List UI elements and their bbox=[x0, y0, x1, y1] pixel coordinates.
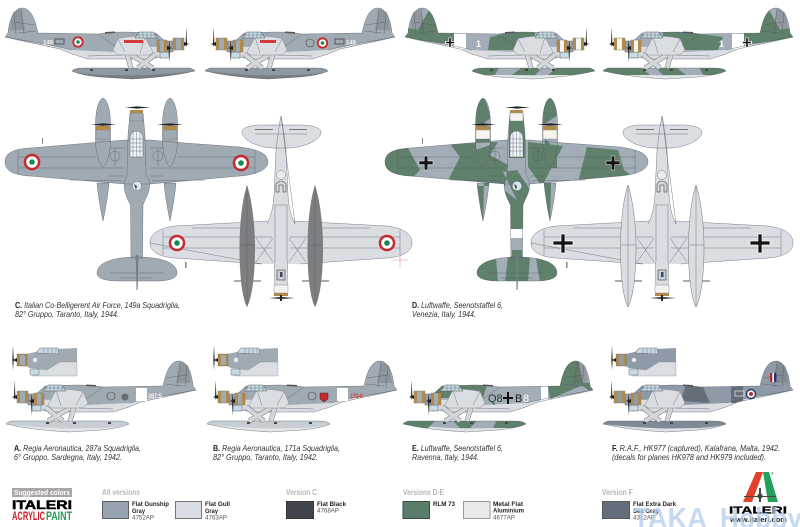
caption A: A. Regia Aeronautica, 287a Squadriglia, bbox=[14, 443, 141, 453]
markings: RAF roundel and fin flash bbox=[735, 373, 776, 399]
floats bbox=[240, 185, 323, 307]
icon: tricolour A with plane bbox=[743, 472, 778, 502]
swatch: Flat Gunship Gray: 4752AP bbox=[132, 514, 154, 522]
markings: Q8 + B8 code: 8 bbox=[523, 393, 529, 405]
plane F: nose detail bbox=[611, 345, 676, 376]
colour group: versions D-E: Versions D-E bbox=[403, 488, 445, 497]
colour group: all versions bbox=[102, 488, 230, 522]
markings: Q8 + B8 code: Q8 bbox=[488, 393, 503, 405]
colour group: version F: Version F bbox=[602, 488, 633, 497]
markings: roundel and code: 149 bbox=[346, 40, 357, 46]
markings: band and code: 287-5 bbox=[148, 394, 163, 400]
swatch: Flat Extra Dark Sea Gray bbox=[602, 501, 676, 522]
plane C: right side profile bbox=[205, 8, 395, 79]
caption C: C. Italian Co-Belligerent Air Force, 149a Squadriglia, bbox=[15, 300, 180, 310]
text: Venezia, Italy, 1944. bbox=[412, 309, 476, 319]
watermark bbox=[633, 503, 800, 527]
swatch: Metal Flat Aluminium: Aluminium bbox=[493, 508, 524, 514]
swatch: Metal Flat Aluminium bbox=[464, 501, 524, 522]
swatch: Flat Gull Gray bbox=[176, 501, 230, 522]
plane F: side profile bbox=[603, 361, 793, 432]
wing crosses bbox=[419, 156, 620, 170]
markings: cross and number bbox=[719, 38, 752, 49]
plane A: side profile bbox=[6, 361, 196, 432]
swatch: Flat Black: 4768AP bbox=[317, 508, 339, 514]
swatch: Flat Extra Dark Sea Gray: Flat Extra Dark bbox=[633, 501, 676, 508]
plane B: side profile bbox=[207, 361, 397, 432]
caption E: E. Luftwaffe, Seenotstaffel 6, bbox=[412, 443, 503, 453]
plane C: left side profile bbox=[5, 8, 195, 79]
text: 82° Gruppo, Taranto, Italy, 1944. bbox=[15, 309, 119, 319]
plane C: upper plan view bbox=[5, 98, 268, 290]
swatch: Flat Gunship Gray: Flat Gunship bbox=[132, 501, 169, 508]
wing crosses bbox=[553, 234, 770, 253]
markings: cross and number: 1 bbox=[476, 39, 481, 49]
caption B: B. Regia Aeronautica, 171a Squadriglia, bbox=[213, 443, 340, 453]
text: 6° Gruppo, Sardegna, Italy, 1942. bbox=[14, 452, 122, 462]
plane D: left side profile bbox=[400, 8, 595, 79]
markings: band, badge and code bbox=[308, 388, 364, 402]
floats bbox=[620, 185, 704, 307]
colour group: version F bbox=[602, 488, 676, 522]
swatch: Flat Gull Gray: Flat Gull bbox=[205, 501, 230, 508]
logo: Italeri acrylic paint: ACRYLIC bbox=[12, 511, 45, 523]
logo: Italeri acrylic paint: PAINT bbox=[46, 511, 72, 523]
wing roundels bbox=[24, 154, 249, 171]
swatch: RLM 73: RLM 73 bbox=[433, 501, 455, 508]
colour group: all versions: All versions bbox=[102, 488, 140, 497]
plane E: side profile bbox=[403, 358, 598, 432]
text: Ravenna, Italy, 1944. bbox=[412, 452, 479, 462]
swatch: Flat Extra Dark Sea Gray: 4312AP bbox=[633, 514, 655, 522]
markings: cross and number: 1 bbox=[719, 39, 724, 49]
swatch: Flat Gunship Gray bbox=[102, 501, 169, 522]
plane A: nose detail bbox=[12, 345, 77, 376]
swatch: Flat Gunship Gray: Gray bbox=[132, 508, 145, 515]
colour group: versions D-E bbox=[403, 488, 524, 522]
markings: Q8 + B8 code bbox=[488, 392, 529, 405]
logo: Italeri acrylic paint: Suggested colors bbox=[14, 488, 70, 497]
logo: Italeri acrylic paint: ITALERI bbox=[12, 498, 72, 512]
swatch: Flat Gull Gray: Gray bbox=[205, 508, 218, 515]
caption F: F. R.A.F., HK977 (captured), Kalafrana, Malta, 1942. bbox=[612, 443, 780, 453]
markings: band, badge and code: 171-8 bbox=[350, 394, 364, 400]
plane B: nose detail bbox=[213, 345, 278, 376]
registration mark bbox=[393, 253, 408, 267]
wing roundels bbox=[169, 235, 395, 251]
swatch: Flat Extra Dark Sea Gray: Sea Gray bbox=[633, 508, 659, 515]
markings: cross and number bbox=[445, 38, 481, 49]
logo: Italeri: ITALERI bbox=[729, 506, 787, 516]
markings: roundel and code bbox=[260, 37, 357, 49]
swatch: Flat Black: Flat Black bbox=[317, 501, 346, 508]
plane D: upper plan view bbox=[380, 95, 648, 290]
markings: roundel and code bbox=[43, 36, 143, 48]
swatch: Flat Gull Gray: 4763AP bbox=[205, 514, 227, 522]
colour group: version C bbox=[286, 488, 346, 518]
swatch: Flat Black bbox=[286, 501, 346, 518]
plane C: lower plan view bbox=[150, 116, 412, 307]
logo: Italeri: ® bbox=[771, 471, 774, 476]
swatch: Metal Flat Aluminium: 4677AP bbox=[493, 514, 515, 522]
logo: Italeri acrylic paint bbox=[12, 488, 72, 523]
caption D: D. Luftwaffe, Seenotstaffel 6, bbox=[412, 300, 503, 310]
text: (decals for planes HK978 and HK979 included). bbox=[612, 452, 766, 462]
markings: roundel and code: 149 bbox=[43, 40, 54, 46]
logo: Italeri bbox=[729, 471, 787, 524]
markings: Q8 + B8 code: B bbox=[515, 393, 522, 405]
markings: band and code bbox=[107, 388, 163, 401]
plane D: right side profile bbox=[603, 8, 798, 79]
swatch: Metal Flat Aluminium: Metal Flat bbox=[493, 501, 524, 508]
plane D: lower plan view bbox=[531, 116, 793, 307]
text: 82° Gruppo, Taranto, Italy, 1942. bbox=[213, 452, 318, 462]
logo: Italeri: www.italeri.com bbox=[729, 517, 787, 524]
colour group: version C: Version C bbox=[286, 488, 317, 497]
